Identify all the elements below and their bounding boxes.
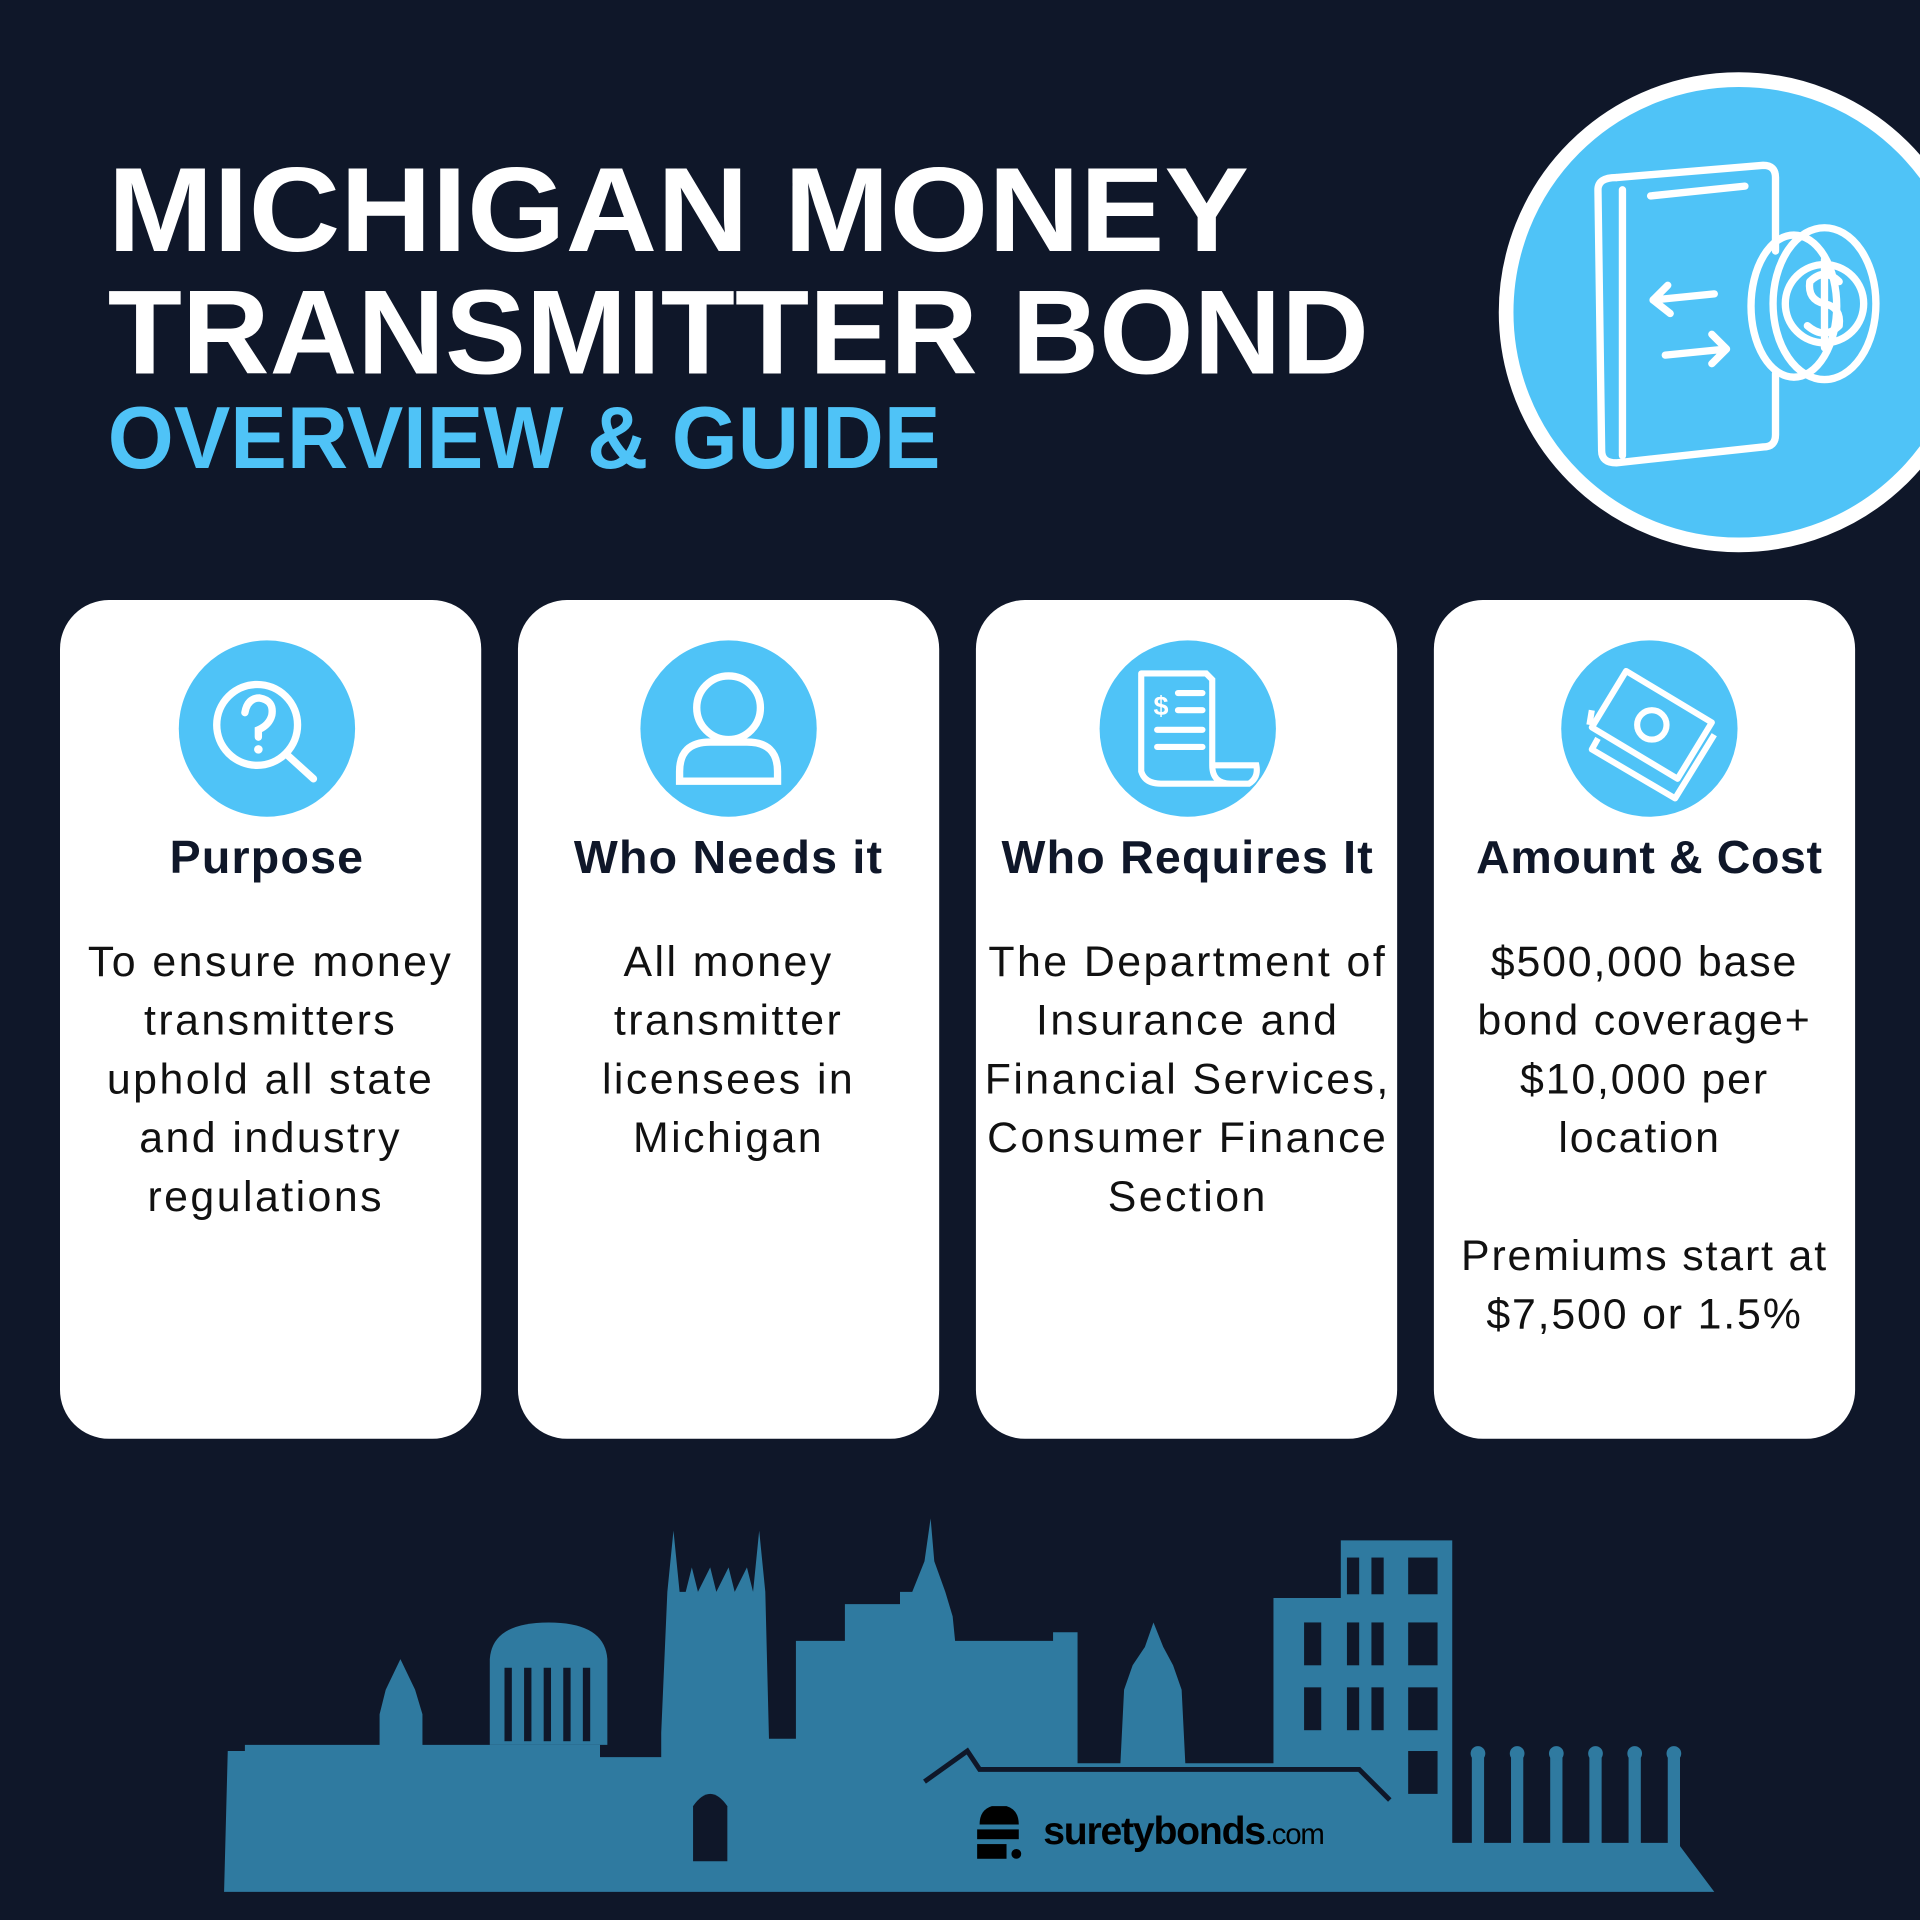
- body text: All money: [623, 938, 834, 986]
- panel: who needs it: [518, 600, 939, 1439]
- body text: transmitter: [614, 997, 843, 1045]
- icon: phone money transfer: [1506, 80, 1920, 545]
- skyline: [224, 1518, 1714, 1892]
- columns: [1472, 1751, 1484, 1847]
- body text: Section: [1108, 1173, 1268, 1221]
- title: [108, 143, 1369, 399]
- body text: $10,000 per: [1520, 1055, 1769, 1103]
- icon: magnifier question: [179, 640, 355, 817]
- body text: transmitters: [144, 997, 397, 1045]
- icon: cash: [1561, 640, 1738, 817]
- logo: suretybonds.com: suretybonds.com: [1043, 1810, 1324, 1853]
- body text: The Department of: [988, 938, 1387, 986]
- rotunda: [490, 1622, 607, 1745]
- body text: uphold all state: [107, 1055, 434, 1103]
- icon: person: [640, 640, 817, 817]
- body text: Consumer Finance: [987, 1114, 1388, 1162]
- heading: Amount & Cost: [1476, 831, 1823, 883]
- panel: amount & cost: [1434, 600, 1855, 1439]
- heading: Who Requires It: [1002, 831, 1374, 883]
- title: MICHIGAN MONEY: [108, 143, 1249, 277]
- body text: [985, 938, 1391, 1221]
- body text: [88, 938, 453, 1221]
- logo: suretybonds.com: [977, 1806, 1324, 1859]
- icon: document: $: [1153, 691, 1168, 721]
- icon: document: [1100, 640, 1276, 817]
- body text: $500,000 base: [1491, 938, 1798, 986]
- heading: Purpose: [170, 831, 364, 883]
- body text: To ensure money: [88, 938, 453, 986]
- body text: $7,500 or 1.5%: [1486, 1291, 1803, 1339]
- body text: regulations: [147, 1173, 384, 1221]
- body text: location: [1558, 1114, 1721, 1162]
- body text: bond coverage+: [1477, 997, 1812, 1045]
- body text: and industry: [139, 1114, 402, 1162]
- panel: purpose: [60, 600, 481, 1439]
- body text: Premiums start at: [1461, 1232, 1828, 1280]
- panel: who requires it: [976, 600, 1397, 1439]
- body text: Financial Services,: [985, 1055, 1391, 1103]
- body text: licensees in: [602, 1055, 855, 1103]
- title: TRANSMITTER BOND: [108, 265, 1369, 399]
- body text: Michigan: [633, 1114, 824, 1162]
- heading: Who Needs it: [574, 831, 883, 883]
- body text: Insurance and: [1036, 997, 1339, 1045]
- subtitle: OVERVIEW & GUIDE: [108, 388, 940, 487]
- body text: [602, 938, 855, 1162]
- body text: [1461, 938, 1828, 1339]
